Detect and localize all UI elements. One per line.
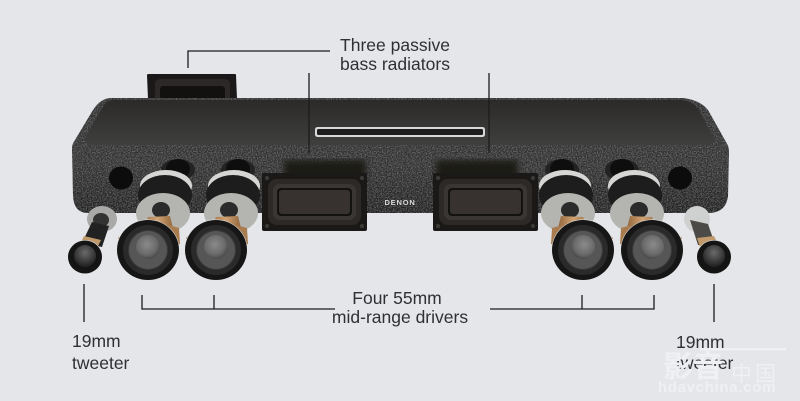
- heading: passive radiators: Three passive: [340, 35, 450, 55]
- watermark: 影音: [663, 351, 723, 384]
- watermark: hdavchina.com: [658, 379, 776, 396]
- leader lines: [84, 51, 714, 322]
- soundbar body: [72, 98, 729, 213]
- mid-range driver 2: [184, 170, 260, 280]
- label: right tweeter: 19mm: [676, 332, 725, 352]
- logo: DENON: [384, 198, 416, 207]
- mid-range driver 4: [608, 170, 684, 280]
- mid-range driver 3: [539, 170, 614, 280]
- heading: mid-range drivers: mid-range drivers: [332, 307, 468, 327]
- driver openings: [161, 159, 639, 181]
- label: left tweeter: tweeter: [72, 353, 130, 373]
- watermark: [658, 348, 786, 396]
- mid-range driver 1: [116, 170, 192, 280]
- label: right tweeter: tweeter: [676, 353, 734, 373]
- left passive radiator: [262, 173, 367, 231]
- right passive radiator: [433, 173, 538, 231]
- right tweeter: [684, 206, 732, 274]
- heading: passive radiators: bass radiators: [340, 54, 450, 74]
- touch slot: [315, 127, 485, 137]
- radiator recesses: [284, 160, 518, 180]
- left side port: [109, 166, 133, 190]
- rear passive radiator: [147, 74, 237, 99]
- watermark: 中国: [731, 363, 779, 386]
- right side port: [668, 166, 692, 190]
- top panel: [85, 100, 714, 145]
- heading: mid-range drivers: Four 55mm: [352, 288, 442, 308]
- left tweeter: [68, 206, 117, 274]
- label: left tweeter: 19mm: [72, 331, 121, 351]
